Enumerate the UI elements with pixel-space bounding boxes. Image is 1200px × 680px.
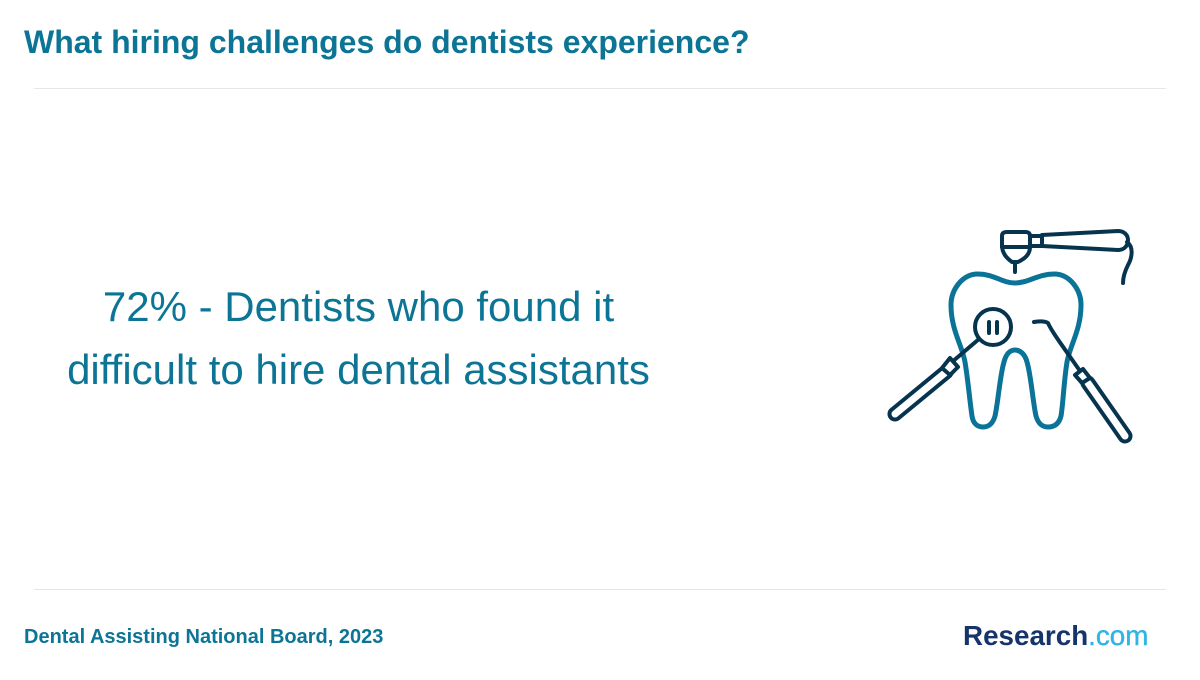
tooth outline xyxy=(951,274,1081,427)
source: Dental Assisting National Board, 2023 xyxy=(24,626,383,648)
main statistic: 72% - Dentists who found it xyxy=(103,283,614,330)
dental probe xyxy=(1034,321,1125,436)
logo: Research.com: Research.com xyxy=(963,620,1148,651)
main statistic: difficult to hire dental assistants xyxy=(67,346,650,393)
title: What hiring challenges do dentists experience? xyxy=(24,24,749,60)
dental mirror xyxy=(895,309,1011,414)
main statistic xyxy=(67,283,650,393)
icon: tooth with dental tools xyxy=(888,229,1134,444)
dental drill xyxy=(1002,231,1132,283)
